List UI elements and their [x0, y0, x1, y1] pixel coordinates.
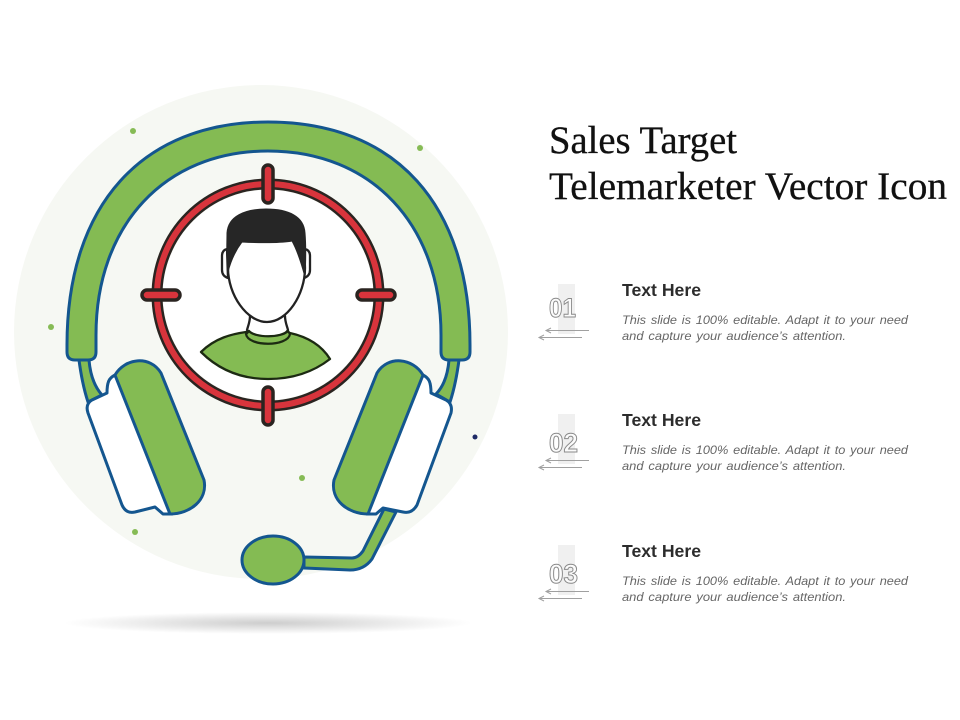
list item 02 — [539, 410, 908, 473]
right ear cup — [333, 361, 423, 514]
title — [549, 119, 947, 208]
text 01 — [622, 313, 908, 343]
decorative dots — [48, 128, 478, 535]
headband — [67, 122, 470, 360]
left ear — [222, 249, 228, 278]
arrows 02 — [539, 458, 589, 470]
title: Telemarketer Vector Icon — [549, 165, 947, 208]
right ear — [304, 249, 310, 278]
ground shadow — [64, 612, 472, 634]
left ear cup — [115, 361, 205, 514]
text 03 — [622, 574, 908, 604]
number 03 — [549, 545, 578, 595]
number 01 — [549, 284, 576, 334]
text 01: This slide is 100% editable. Adapt it to your need — [622, 313, 908, 327]
number 02: 02 — [549, 428, 578, 458]
right ear cup padding — [367, 375, 451, 514]
text 02: This slide is 100% editable. Adapt it to your need — [622, 443, 908, 457]
text 03: This slide is 100% editable. Adapt it to your need — [622, 574, 908, 588]
icon: person — [201, 209, 330, 379]
number 01: 01 — [549, 293, 576, 323]
text 02 — [622, 443, 908, 473]
list item 01 — [539, 280, 908, 343]
title: Sales Target — [549, 119, 737, 162]
number 02 — [549, 414, 578, 464]
neck — [247, 316, 288, 337]
heading 02: Text Here — [622, 410, 701, 430]
microphone boom — [304, 509, 396, 570]
arrows 03 — [539, 589, 589, 601]
text 01: and capture your audience’s attention. — [622, 329, 846, 343]
icon: headset — [67, 122, 470, 584]
right headband connector — [436, 360, 459, 402]
heading 01: Text Here — [622, 280, 701, 300]
text 03: and capture your audience’s attention. — [622, 590, 846, 604]
hair — [227, 209, 306, 277]
collar — [246, 331, 290, 344]
list item 03 — [539, 541, 908, 604]
left ear cup padding — [87, 375, 172, 514]
microphone — [242, 536, 304, 584]
background circle — [14, 85, 508, 579]
text 02: and capture your audience’s attention. — [622, 459, 846, 473]
arrows 01 — [539, 328, 589, 340]
face — [228, 222, 305, 322]
left headband connector — [79, 360, 102, 402]
icon: target reticle — [142, 165, 395, 425]
shoulders — [201, 332, 330, 379]
heading 03: Text Here — [622, 541, 701, 561]
number 03: 03 — [549, 559, 578, 589]
